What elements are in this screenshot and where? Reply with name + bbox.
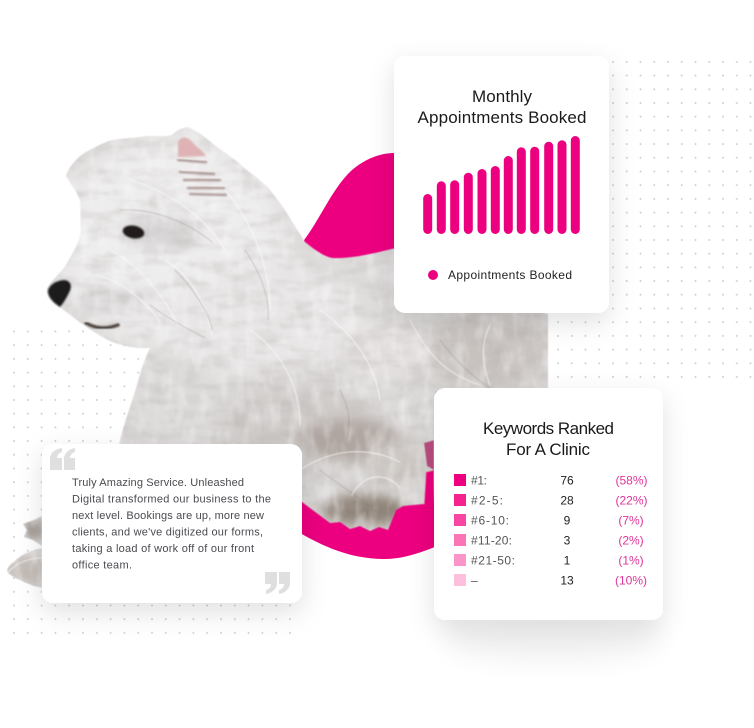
- heading: monthly appointments booked: [418, 87, 586, 127]
- keyword row 6: [454, 574, 647, 588]
- testimonial text: clients, and we've digitized our forms,: [72, 526, 263, 538]
- pink tint in paw fur: [424, 440, 434, 470]
- keyword row 4: 3: [564, 534, 571, 548]
- testimonial text: [72, 477, 271, 572]
- keyword row 4: (2%): [618, 534, 644, 548]
- ear: [178, 138, 226, 195]
- background dot pattern: top right: [552, 55, 754, 383]
- legend: Appointments Booked: [448, 268, 572, 282]
- keyword row 1: (58%): [615, 474, 648, 488]
- keyword row 5: 1: [564, 554, 571, 568]
- keyword row 5: #21-50:: [471, 554, 515, 568]
- testimonial text: next level. Bookings are up, more new: [72, 510, 264, 522]
- heading: keywords ranked for a clinic: For A Clinic: [506, 440, 590, 459]
- icon: opening quote mark: [50, 448, 75, 470]
- eye: [122, 224, 145, 240]
- nose: [48, 280, 71, 307]
- card: monthly appointments chart: [394, 56, 609, 313]
- mouth: [86, 323, 118, 328]
- keyword row 1: #1:: [471, 474, 487, 488]
- heading: monthly appointments booked: Monthly: [472, 87, 532, 106]
- keyword row 3: (7%): [618, 514, 644, 528]
- keyword row 2: [454, 494, 648, 508]
- keyword row 2: 28: [560, 494, 574, 508]
- keyword row 6: 13: [560, 574, 574, 588]
- pink blob behind dog: [295, 153, 540, 559]
- keyword row 2: (22%): [615, 494, 648, 508]
- testimonial text: Digital transformed our business to the: [72, 494, 271, 506]
- keyword row 6: –: [471, 574, 478, 588]
- heading: keywords ranked for a clinic: [483, 419, 614, 459]
- keyword row 3: [454, 514, 644, 528]
- testimonial text: taking a load of work off of our front: [72, 543, 254, 555]
- icon: closing quote mark: [265, 572, 290, 594]
- soft shadow under lower cards: [442, 618, 662, 662]
- testimonial text: Truly Amazing Service. Unleashed: [72, 477, 244, 489]
- testimonial text: office team.: [72, 560, 132, 572]
- keyword row 3: 9: [564, 514, 571, 528]
- heading: monthly appointments booked: Appointments Booked: [418, 108, 586, 127]
- fur strands: [8, 180, 490, 572]
- keyword row 1: [454, 474, 648, 488]
- keyword row 2: #2-5:: [471, 494, 503, 508]
- bar chart: [423, 136, 580, 234]
- keyword row 4: #11-20:: [471, 534, 512, 548]
- keyword row 5: [454, 554, 644, 568]
- keyword row 5: (1%): [618, 554, 644, 568]
- keyword row 3: #6-10:: [471, 514, 509, 528]
- background dot pattern: bottom left: [7, 325, 297, 638]
- keyword row 6: (10%): [615, 574, 647, 588]
- white dog photo illustration: [0, 120, 560, 600]
- keyword row 1: 76: [560, 474, 574, 488]
- card: quote testimonial: [42, 444, 302, 603]
- card: keywords ranked: [434, 388, 663, 620]
- heading: keywords ranked for a clinic: Keywords Ranked: [483, 419, 614, 438]
- keyword row 4: [454, 534, 644, 548]
